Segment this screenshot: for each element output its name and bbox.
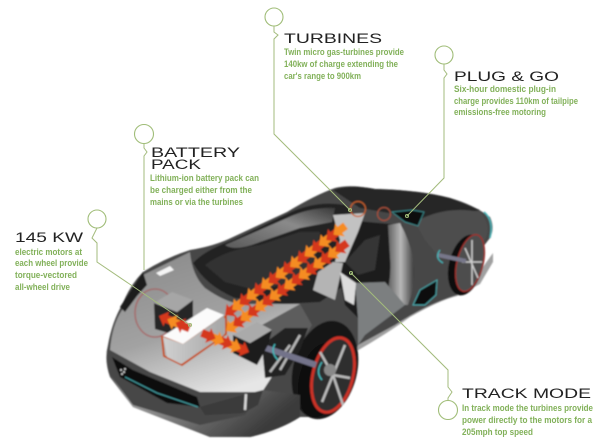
label: battery pack	[150, 145, 259, 208]
label: 145 kw: torque-vectored	[15, 270, 77, 281]
label: turbines: TURBINES	[284, 31, 382, 46]
leader: track mode	[350, 272, 458, 420]
rear haunch	[415, 210, 488, 262]
label: plug and go: Six-hour domestic plug-in	[454, 84, 556, 95]
headlight	[120, 272, 147, 312]
leader: turbines	[265, 8, 352, 212]
hood	[110, 252, 305, 392]
label: battery pack: Lithium-ion battery pack can	[150, 173, 259, 184]
label: track mode	[462, 386, 593, 438]
badge	[120, 368, 126, 375]
label: track mode: TRACK MODE	[462, 386, 591, 401]
label: battery pack: BATTERY	[151, 145, 240, 160]
front axle	[263, 347, 316, 365]
left motor block	[154, 292, 193, 335]
label: plug and go	[454, 69, 578, 118]
leader: plug and go	[406, 46, 453, 218]
windscreen surround	[193, 204, 360, 304]
car illustration	[106, 186, 493, 437]
turbines	[350, 202, 366, 216]
cockpit rear tub	[340, 220, 410, 325]
hood reflection	[156, 266, 174, 276]
label: 145 kw: electric motors at	[15, 247, 83, 258]
arrows to left motor	[156, 309, 193, 336]
leader: battery pack	[134, 124, 154, 270]
label: 145 kw: each wheel provide	[15, 258, 88, 269]
label: 145 kw: 145 KW	[15, 230, 83, 245]
label: track mode: 205mph top speed	[462, 427, 533, 438]
label: turbines: 140kw of charge extending the	[284, 59, 398, 70]
rear roof dark	[333, 187, 480, 220]
label: turbines: Twin micro gas-turbines provide	[284, 47, 404, 58]
side slit	[200, 390, 263, 415]
label: battery pack: PACK	[151, 157, 201, 172]
windscreen glass top	[225, 208, 335, 248]
battery block	[162, 308, 226, 365]
front wheel	[290, 333, 362, 422]
energy arrows upper	[220, 219, 350, 321]
rear intake	[392, 210, 424, 226]
rear tail cyan	[484, 212, 491, 238]
arrows to right motor	[199, 325, 252, 359]
front wheel arch	[282, 314, 368, 426]
rear vent	[413, 280, 437, 305]
right motor block	[233, 322, 272, 365]
energy arrows lower	[221, 236, 352, 337]
grille accent	[125, 377, 198, 407]
label: 145 kw: all-wheel drive	[15, 282, 70, 293]
rear axle	[438, 255, 466, 261]
seat highlights	[313, 262, 343, 300]
label: 145 kw	[15, 230, 88, 293]
label: turbines	[284, 31, 404, 82]
hood dark side near arch	[262, 304, 312, 345]
label: battery pack: be charged either from the	[150, 185, 252, 196]
label: battery pack: mains or via the turbines	[150, 197, 243, 208]
label: plug and go: emissions-free motoring	[454, 107, 546, 118]
leader: 145 kw	[88, 210, 192, 326]
car body silhouette	[106, 186, 493, 437]
label: plug and go: PLUG & GO	[454, 69, 559, 84]
rear wheel	[442, 231, 490, 299]
front bumper lower	[110, 375, 300, 437]
label: turbines: car's range to 900km	[284, 71, 361, 82]
door sill and door	[384, 223, 414, 305]
interior	[205, 232, 320, 290]
red motor ring	[135, 289, 175, 337]
ground shadow	[355, 253, 493, 352]
